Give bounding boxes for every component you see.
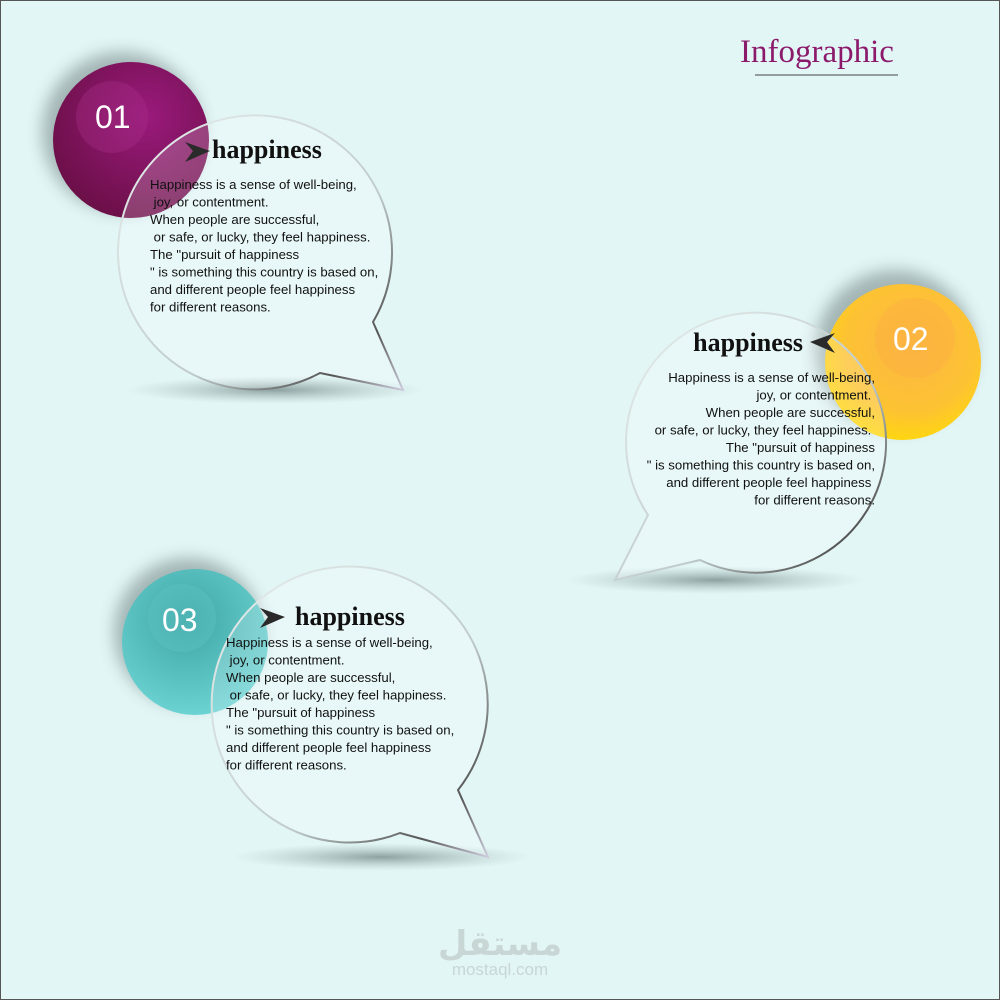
text 02: joy, or contentment.: [756, 388, 875, 402]
icon: circle 03: 03: [162, 602, 198, 638]
heading 01: happiness: [212, 135, 322, 164]
text 03: " is something this country is based on,: [226, 722, 454, 738]
text 01: or safe, or lucky, they feel happiness.: [150, 230, 370, 244]
icon: circle 02: [815, 270, 981, 440]
text 02: " is something this country is based on,: [647, 458, 875, 472]
watermark: مستقل: [438, 925, 562, 963]
text 01: The "pursuit of happiness: [150, 247, 300, 262]
text 01: for different reasons.: [150, 300, 271, 314]
icon: circle 01: 01: [95, 99, 131, 135]
bubble 03: [212, 567, 488, 857]
text 03: joy, or contentment.: [226, 652, 344, 668]
text 01: Happiness is a sense of well-being,: [150, 177, 357, 192]
text 03: When people are successful,: [226, 670, 395, 685]
text 03: Happiness is a sense of well-being,: [226, 635, 433, 650]
heading 02: happiness: [693, 328, 803, 357]
text 03: or safe, or lucky, they feel happiness.: [226, 688, 446, 702]
text 03: for different reasons.: [226, 758, 347, 772]
panel: item 01: [42, 52, 425, 404]
shadow 02: [565, 566, 865, 594]
text 01: joy, or contentment.: [150, 194, 268, 210]
text 02: The "pursuit of happiness: [726, 440, 875, 455]
shadow 01: [125, 376, 425, 404]
text 03: and different people feel happiness: [226, 740, 431, 755]
title: Infographic: [740, 34, 894, 70]
text 02: for different reasons.: [754, 492, 875, 508]
panel: item 03: [114, 558, 532, 871]
text 01: When people are successful,: [150, 212, 319, 227]
text 01: and different people feel happiness: [150, 282, 355, 297]
text 01: " is something this country is based on,: [150, 264, 378, 280]
icon: circle 01: [42, 52, 209, 218]
bubble 01: [118, 115, 403, 390]
text 02: Happiness is a sense of well-being,: [668, 370, 875, 385]
icon: circle 02: 02: [893, 321, 929, 357]
watermark: mostaql.com: [452, 960, 548, 979]
heading 03: happiness: [295, 602, 405, 631]
text 02: When people are successful,: [706, 405, 875, 420]
icon: circle 03: [114, 558, 268, 715]
bubble 02: [615, 313, 886, 580]
shadow 03: [232, 843, 532, 871]
text 02: or safe, or lucky, they feel happiness.: [655, 422, 875, 438]
panel: item 02: [565, 270, 981, 594]
text 02: and different people feel happiness: [666, 475, 875, 490]
text 03: The "pursuit of happiness: [226, 705, 376, 720]
